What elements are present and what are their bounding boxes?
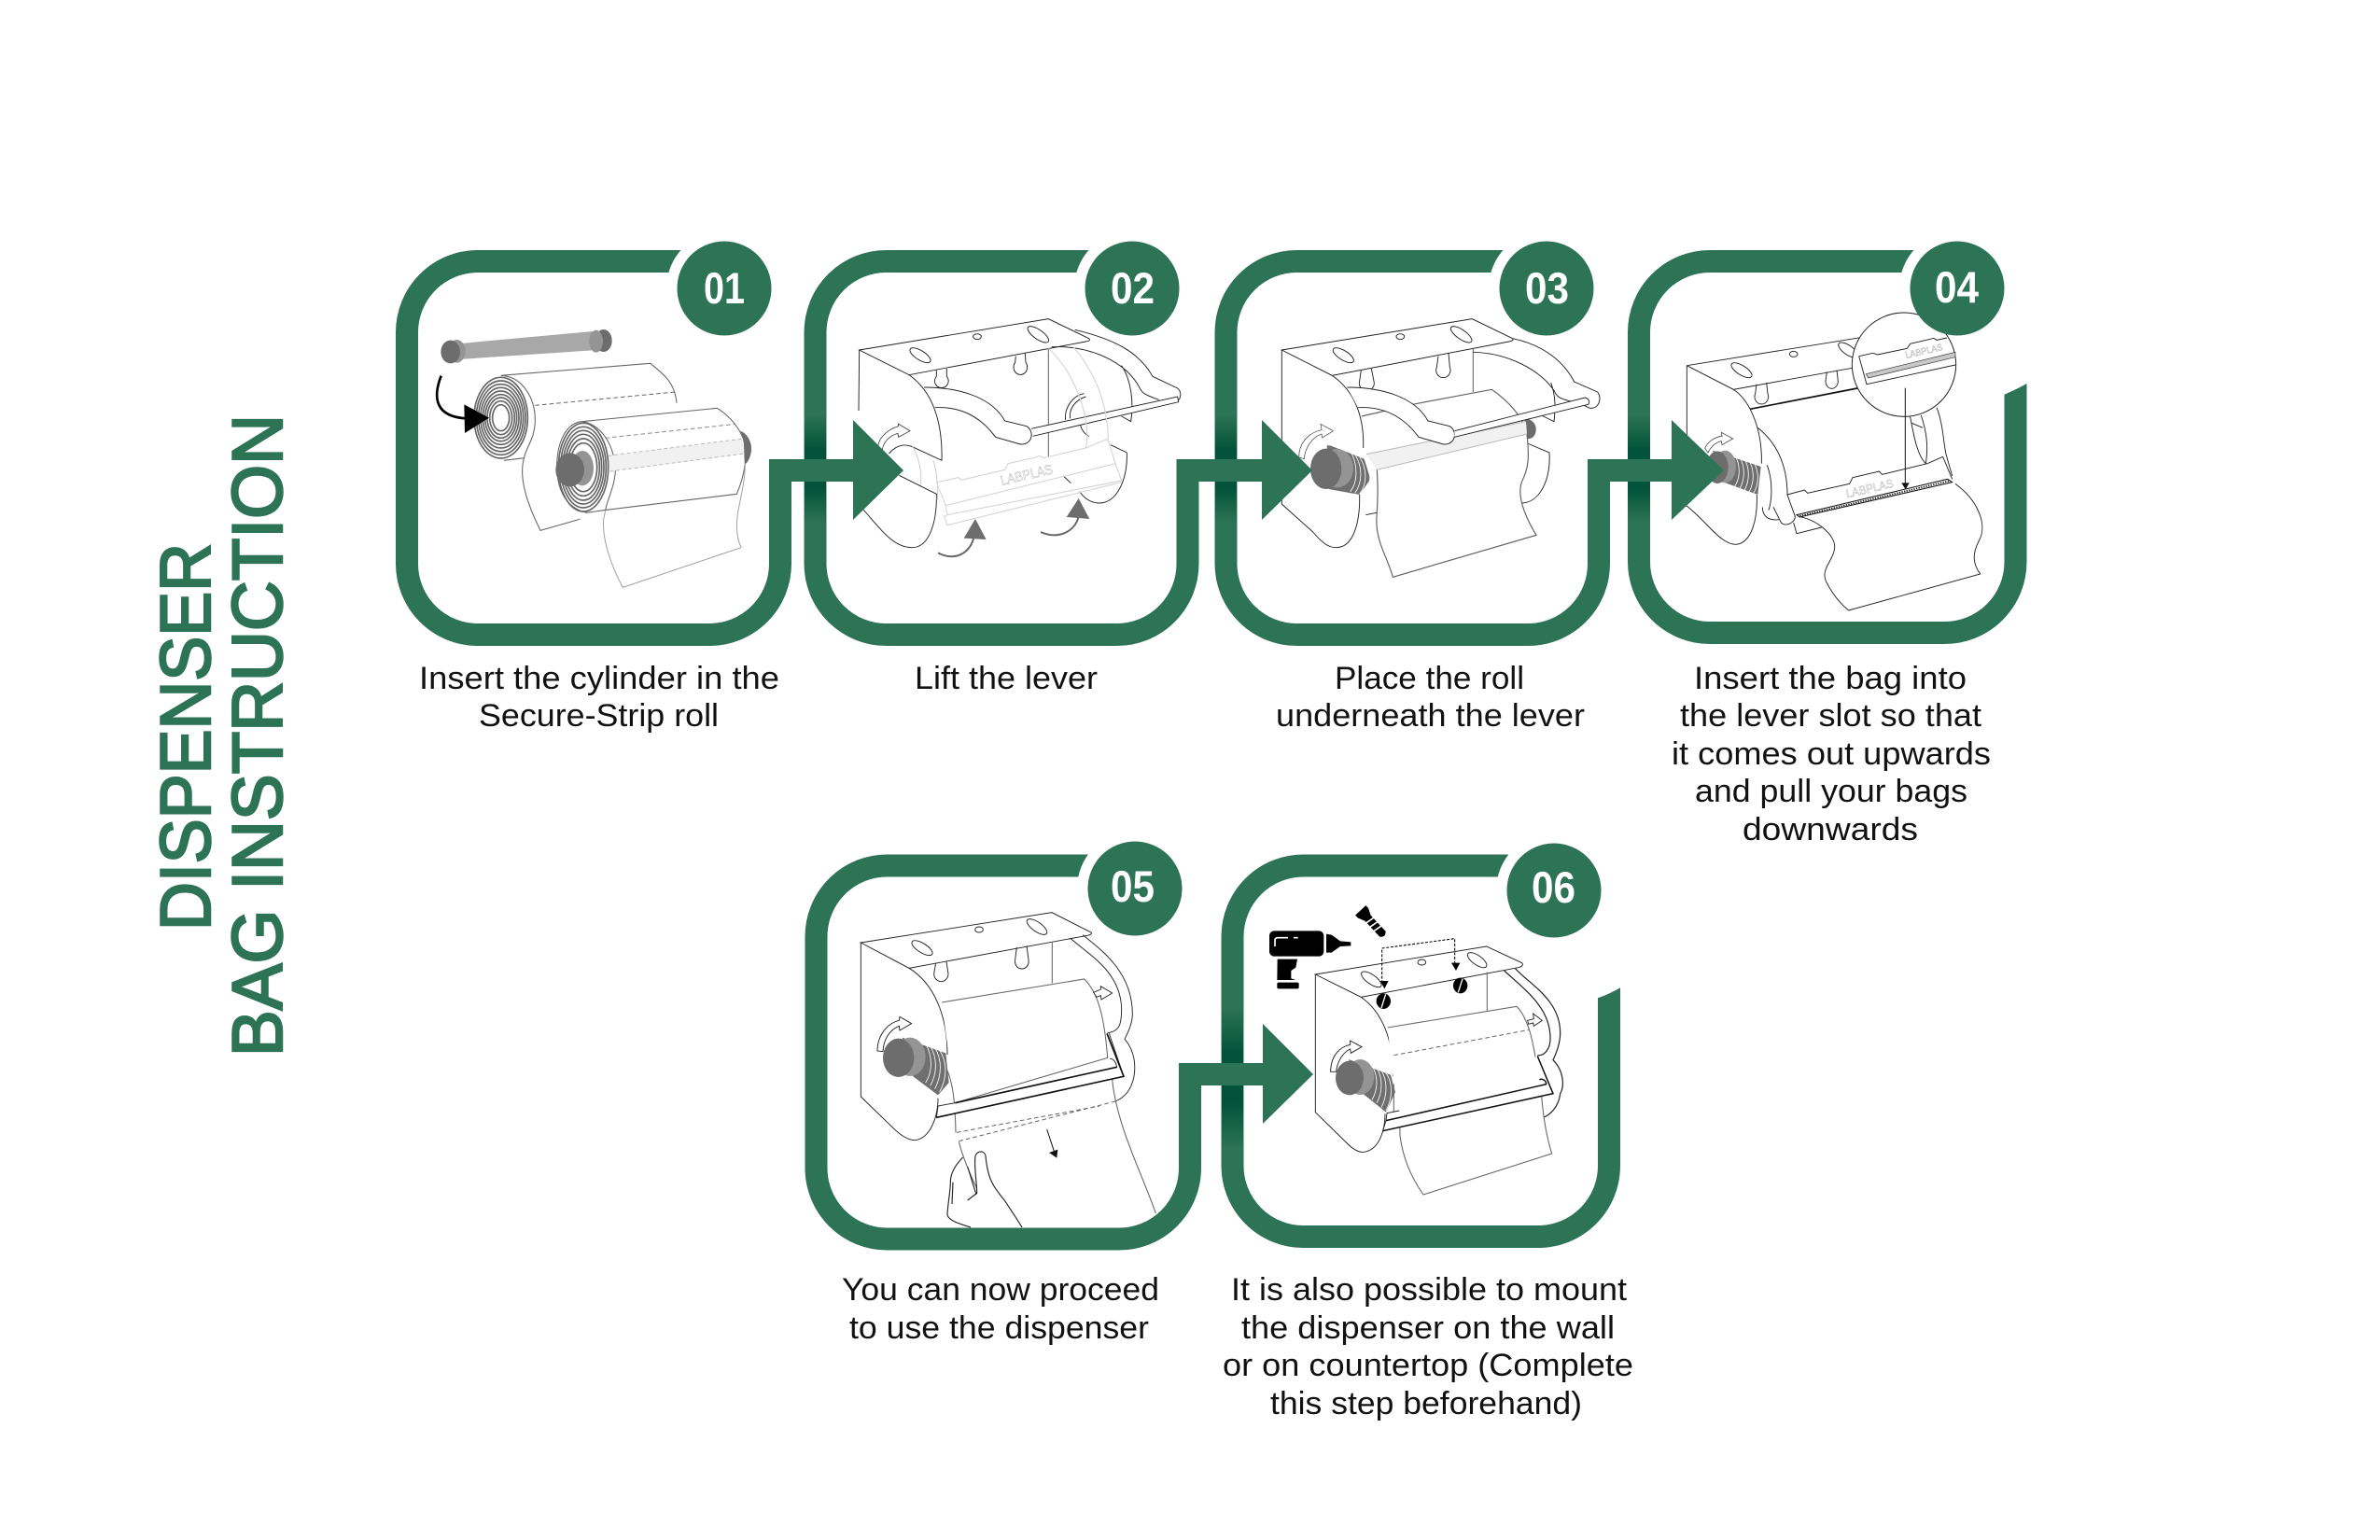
caption: or on countertop (Complete bbox=[1223, 1348, 1633, 1383]
number badge: 01 bbox=[704, 263, 745, 313]
caption: the lever slot so that bbox=[1680, 698, 1982, 734]
number badge: 03 bbox=[1525, 263, 1569, 313]
icon: screw bbox=[1355, 905, 1390, 941]
caption: It is also possible to mount bbox=[1231, 1272, 1628, 1308]
magnifier callout bbox=[1852, 313, 1956, 416]
panel: step 03 bbox=[1226, 231, 1643, 734]
number badge bbox=[1506, 844, 1602, 937]
caption bbox=[842, 1272, 1159, 1346]
caption bbox=[419, 661, 779, 734]
panel: step 06 bbox=[1223, 833, 1633, 1421]
caption bbox=[1223, 1272, 1633, 1421]
caption: Secure-Strip roll bbox=[479, 698, 719, 734]
caption: this step beforehand) bbox=[1270, 1386, 1582, 1421]
caption: underneath the lever bbox=[1276, 698, 1585, 734]
icon: drill bbox=[1269, 931, 1351, 988]
caption: Place the roll bbox=[1335, 661, 1524, 696]
caption bbox=[1672, 661, 1991, 847]
arrow: step 3 to 4 bbox=[1589, 415, 1724, 523]
illustration: dispenser with lifted lever bbox=[859, 319, 1181, 556]
illustration: bag inserted into lever slot bbox=[1687, 313, 1982, 610]
caption: and pull your bags bbox=[1695, 774, 1967, 809]
icon: screw holes bbox=[1377, 978, 1467, 1009]
caption bbox=[1276, 661, 1585, 734]
caption: it comes out upwards bbox=[1672, 736, 1991, 772]
number badge: 05 bbox=[1111, 861, 1155, 911]
title bbox=[147, 414, 298, 1057]
number badge bbox=[1088, 842, 1182, 935]
panel: step 01 bbox=[407, 231, 821, 734]
icon: dashed guide arrows bbox=[1380, 939, 1460, 988]
panel: step 05 bbox=[816, 831, 1232, 1346]
caption: Insert the bag into bbox=[1694, 661, 1967, 696]
arrow: step 2 to 3 bbox=[1177, 415, 1312, 523]
panel: step 02 bbox=[816, 231, 1232, 696]
panel: step 04 bbox=[1639, 231, 2028, 847]
illustration: pulling a bag from dispenser bbox=[861, 913, 1155, 1227]
illustration: dispenser with lifted lever: LABPLAS bbox=[1000, 463, 1055, 489]
illustration: bag inserted into lever slot: LABPLAS bbox=[1845, 477, 1895, 500]
number badge bbox=[1910, 241, 2005, 336]
caption: the dispenser on the wall bbox=[1241, 1310, 1615, 1346]
number badge bbox=[1085, 241, 1180, 336]
arrow: step 1 to 2 bbox=[769, 415, 903, 523]
illustration: roll under lever bbox=[1281, 319, 1600, 577]
arrow: step 5 to 6 bbox=[1179, 1008, 1313, 1148]
arrow: insertion direction bbox=[1901, 388, 1910, 489]
caption: Insert the cylinder in the bbox=[419, 661, 779, 696]
magnifier callout: LABPLAS bbox=[1905, 343, 1944, 361]
number badge: 06 bbox=[1532, 862, 1575, 912]
caption: You can now proceed bbox=[842, 1272, 1159, 1308]
illustration: wall mounting bbox=[1269, 905, 1562, 1195]
title: DISPENSER bbox=[147, 543, 226, 931]
caption: Lift the lever bbox=[915, 661, 1098, 696]
caption: downwards bbox=[1743, 812, 1918, 847]
number badge: 04 bbox=[1935, 262, 1979, 312]
number badge bbox=[1499, 241, 1594, 336]
number badge: 02 bbox=[1111, 263, 1155, 313]
title: BAG INSTRUCTION bbox=[218, 414, 298, 1057]
number badge bbox=[678, 241, 771, 336]
caption: to use the dispenser bbox=[849, 1310, 1149, 1346]
illustration: cylinder and rolls bbox=[437, 329, 751, 591]
